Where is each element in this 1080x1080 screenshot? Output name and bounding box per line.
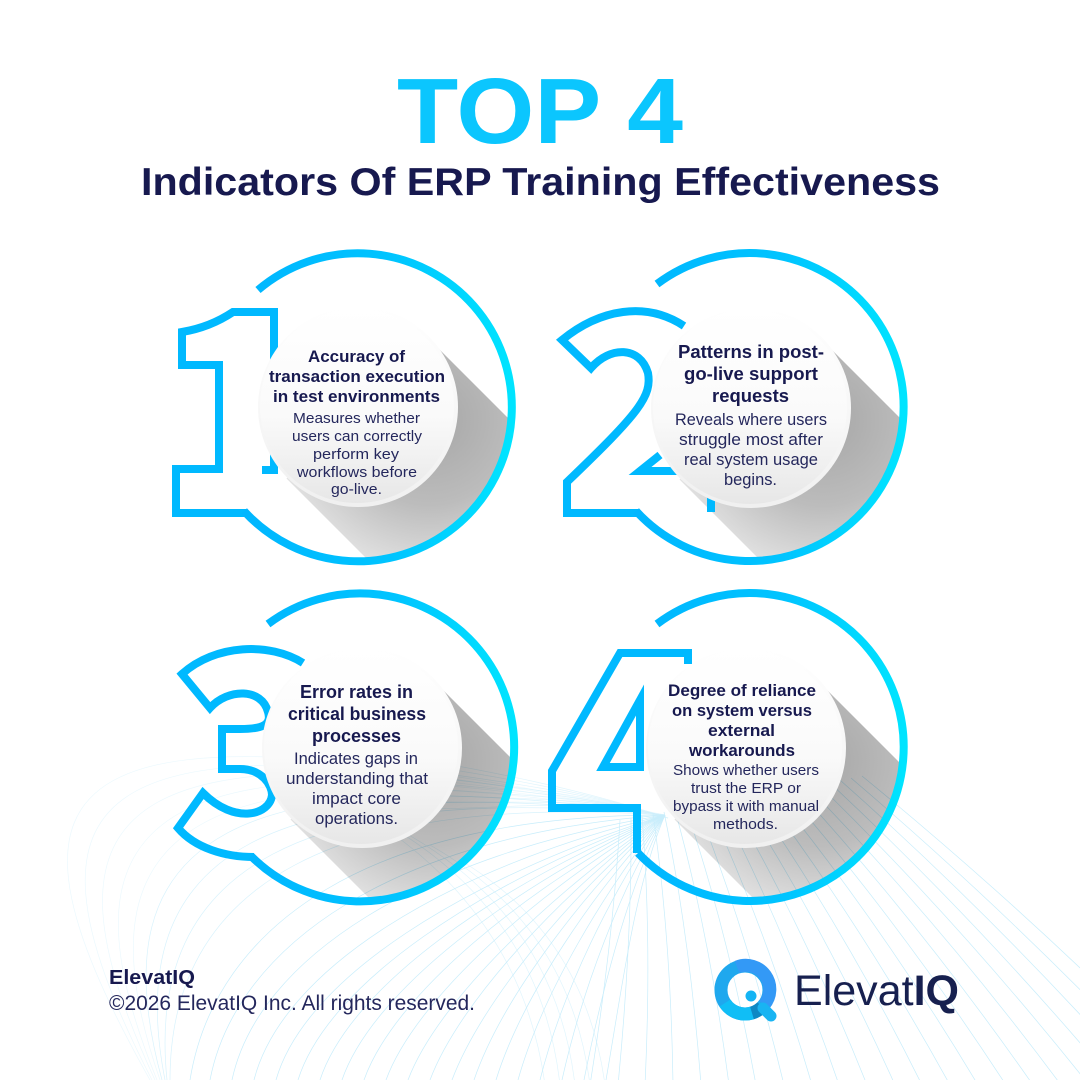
footer: copyright: ©2026 ElevatIQ Inc. All rights reserved. [109, 992, 475, 1015]
description 2: Reveals where users [675, 411, 827, 429]
disc 2 [651, 308, 851, 508]
description 4: trust the ERP or [691, 780, 801, 797]
heading 3: critical business [288, 704, 426, 724]
description 1: perform key [313, 446, 400, 463]
background line mesh [67, 745, 1080, 1080]
description 3: Indicates gaps in [294, 750, 418, 768]
description 1: users can correctly [292, 428, 423, 445]
ring 2 [636, 253, 904, 561]
heading 1: in test environments [273, 387, 440, 406]
title: TOP 4: TOP 4 [397, 59, 683, 163]
footer: company name: ElevatIQ [109, 967, 195, 989]
heading 4: workarounds [688, 741, 795, 760]
description 4 [673, 762, 819, 833]
heading 3: processes [312, 726, 401, 746]
disc 4 [646, 648, 846, 848]
long shadow 1 [286, 350, 508, 558]
description 4: Shows whether users [673, 762, 819, 779]
heading 4: on system versus [672, 701, 812, 720]
description 2: begins. [724, 471, 777, 489]
panel: indicator 1 [172, 249, 516, 566]
ring 4 [638, 593, 904, 901]
description 4: methods. [713, 816, 778, 833]
heading 1 [269, 347, 445, 406]
numeral 4 counter [603, 700, 640, 767]
disc 1 [258, 307, 458, 507]
panel: indicator 2 [556, 249, 908, 565]
description 3: understanding that [286, 770, 428, 788]
description 1 [292, 410, 423, 498]
description 1: workflows before [296, 464, 417, 481]
description 3: impact core [312, 790, 401, 808]
heading 3 [288, 682, 426, 746]
description 1: Measures whether [293, 410, 420, 427]
ring 1 [244, 253, 512, 561]
heading 4: Degree of reliance [668, 681, 816, 700]
heading 1: transaction execution [269, 367, 445, 386]
panel: indicator 3 [173, 589, 518, 906]
heading 2: go-live support [684, 363, 818, 384]
description 4: bypass it with manual [673, 798, 819, 815]
numeral 2 outline [562, 311, 711, 513]
description 2 [675, 411, 827, 489]
heading 2 [678, 341, 824, 406]
description 3: operations. [315, 810, 398, 828]
description 2: struggle most after [679, 431, 824, 449]
numeral 1 outline [176, 312, 274, 513]
subtitle: Indicators Of ERP Training Effectiveness [141, 161, 940, 204]
logo [721, 965, 959, 1016]
description 2: real system usage [684, 451, 818, 469]
long shadow 4 [674, 691, 899, 897]
disc 3 [262, 648, 462, 848]
panel: indicator 4 [548, 589, 908, 905]
icon: Q mark [721, 965, 771, 1016]
heading 2: Patterns in post- [678, 341, 824, 362]
numeral 3 outline [178, 649, 303, 857]
logo wordmark: ElevatIQ [794, 967, 959, 1015]
heading 2: requests [712, 385, 789, 406]
long shadow 3 [290, 691, 510, 897]
heading 1: Accuracy of [308, 347, 405, 366]
ring 3 [251, 593, 514, 901]
heading 3: Error rates in [300, 682, 413, 702]
heading 4: external [708, 721, 775, 740]
long shadow 2 [680, 351, 900, 557]
numeral 4 outline [552, 653, 688, 853]
description 1: go-live. [331, 481, 382, 498]
heading 4 [668, 681, 816, 760]
description 3 [286, 750, 428, 828]
